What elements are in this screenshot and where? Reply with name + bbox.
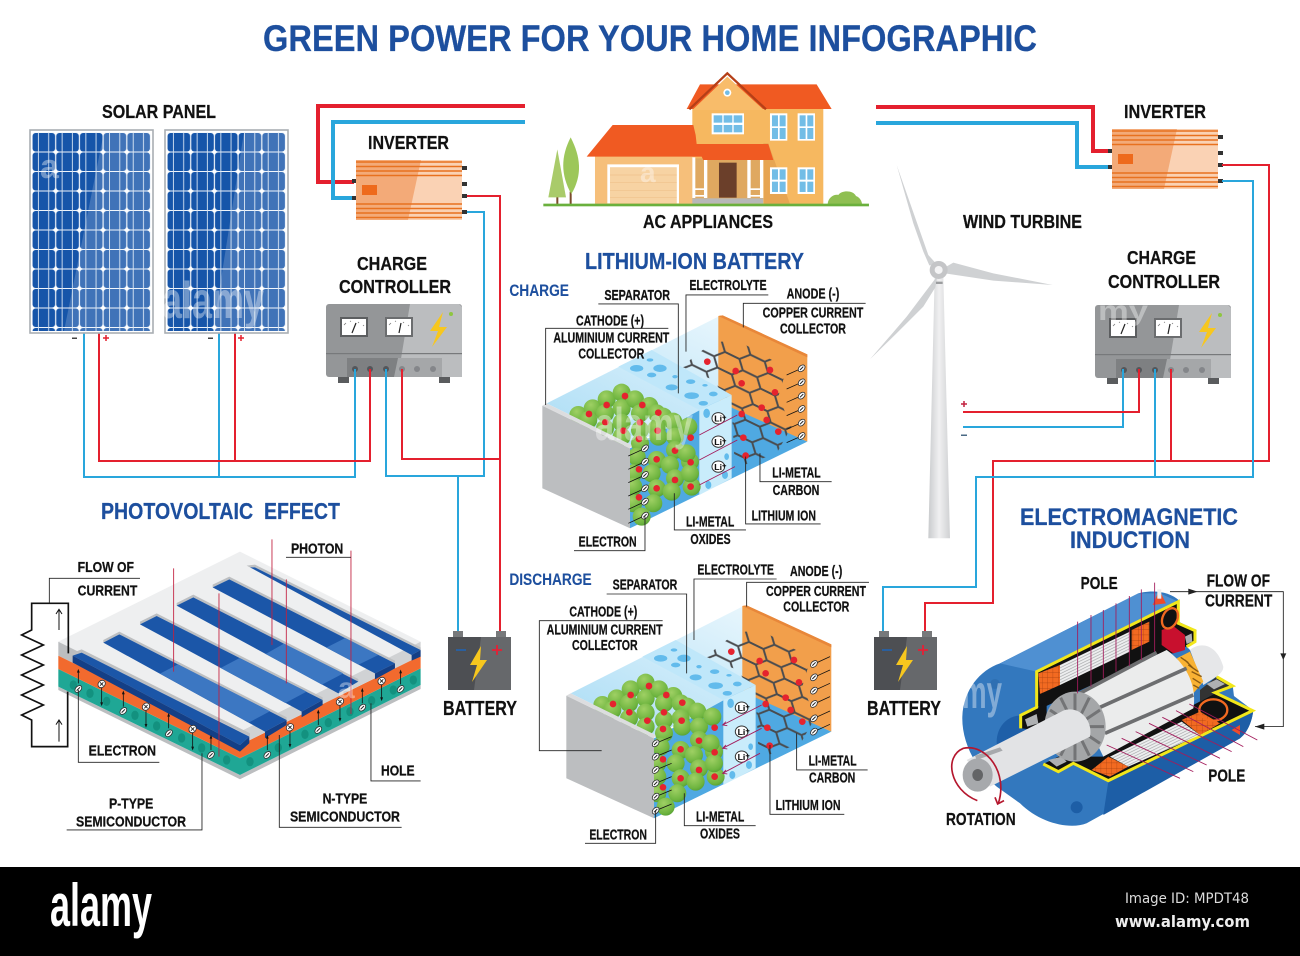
- charge controller label right: CONTROLLER: [1108, 272, 1220, 292]
- lithium ions: [699, 413, 737, 485]
- labels: SEPARATOR: [604, 288, 670, 304]
- stator windings: [1038, 622, 1220, 777]
- icon: charge controller left: [326, 304, 462, 383]
- semiconductor holes: [70, 675, 417, 766]
- lithium ions: Li⁺: [738, 703, 750, 713]
- panel: charge cell: [509, 278, 866, 551]
- icon: wind turbine: [870, 165, 1053, 538]
- shaft: [963, 709, 1090, 792]
- labels: P-TYPE: [109, 796, 153, 812]
- strip front ends: [73, 650, 421, 752]
- labels: ELECTROLYTE: [689, 278, 767, 294]
- labels: [553, 278, 863, 551]
- current flow arrow: [1170, 589, 1286, 730]
- labels: [76, 541, 415, 831]
- right inverter wiring from house: [876, 107, 1111, 167]
- panel: discharge cell: DISCHARGE: [509, 570, 592, 589]
- circuit with resistor: [22, 603, 68, 747]
- stock image watermarks: a: [640, 157, 656, 188]
- icon: solar panel left: [30, 130, 153, 333]
- charge controller label left: CONTROLLER: [339, 277, 451, 297]
- lithium ions: Li⁺: [714, 414, 727, 424]
- electron arrows: [628, 364, 806, 523]
- icon: battery left: [448, 631, 511, 690]
- labels: LITHIUM ION: [752, 509, 816, 525]
- leader lines: [546, 295, 866, 551]
- stock image watermarks: my: [962, 666, 1002, 718]
- wiring: solar panels to charge controller: [84, 333, 370, 477]
- title: GREEN POWER FOR YOUR HOME INFOGRAPHIC: [263, 18, 1037, 59]
- icon: charge controller right: [1095, 305, 1231, 384]
- blue strips: [73, 567, 421, 745]
- labels: ELECTRON: [89, 744, 156, 760]
- labels: LITHIUM ION: [776, 798, 841, 814]
- bottom band: [0, 867, 1300, 956]
- battery cell cutaway: [542, 315, 807, 528]
- magnetic field arrows: [1078, 583, 1257, 778]
- left inverter wiring from house: [318, 106, 525, 198]
- motor housing: [962, 591, 1253, 826]
- charge controller label left: [339, 254, 451, 297]
- layers: [58, 552, 421, 779]
- heading: lithium-ion battery: LITHIUM-ION BATTERY: [585, 248, 804, 274]
- labels: ROTATION: [946, 809, 1016, 829]
- holes and electrons: [74, 676, 405, 760]
- labels: HOLE: [381, 764, 415, 780]
- labels: ALUMINIUM CURRENT: [553, 331, 669, 347]
- labels: LI-METAL: [686, 515, 734, 531]
- labels: COLLECTOR: [783, 600, 850, 616]
- labels: LI-METAL: [696, 810, 744, 826]
- labels: CURRENT: [78, 583, 138, 599]
- labels: ALUMINIUM CURRENT: [547, 622, 663, 638]
- stock image watermarks: [40, 148, 1149, 718]
- labels: ELECTRON: [589, 827, 647, 843]
- labels: COPPER CURRENT: [766, 584, 866, 600]
- electron arrows: [651, 657, 830, 815]
- finger shadows: [68, 565, 421, 737]
- labels: [547, 562, 866, 843]
- labels: N-TYPE: [323, 791, 367, 807]
- icon: inverter left: [352, 160, 467, 220]
- labels: COPPER CURRENT: [763, 305, 863, 321]
- labels: SEMICONDUCTOR: [76, 815, 187, 831]
- labels: POLE: [1081, 573, 1118, 593]
- icon: trees: [548, 137, 579, 204]
- labels: COLLECTOR: [578, 346, 645, 362]
- lithium ions: Li⁺: [738, 727, 750, 737]
- lithium ions: Li⁺: [738, 752, 750, 762]
- ac appliances label: AC APPLIANCES: [643, 212, 773, 232]
- battery label right: BATTERY: [867, 698, 942, 720]
- labels: COLLECTOR: [572, 638, 638, 654]
- lithium ions: Li⁺: [714, 462, 727, 472]
- labels: POLE: [1208, 766, 1245, 786]
- wind turbine polarity marks: [961, 401, 967, 436]
- labels: CARBON: [809, 771, 855, 787]
- battery label left: BATTERY: [443, 698, 518, 720]
- heading: electromagnetic induction: [1020, 504, 1238, 554]
- website: www.alamy.com: [1115, 912, 1250, 931]
- labels: FLOW OF: [1207, 571, 1270, 591]
- charge controller label right: CHARGE: [1127, 248, 1196, 268]
- charge carrier arrows: [77, 670, 402, 750]
- wiring: right inverter and controller to right battery: [883, 165, 1269, 633]
- panel: discharge cell: [509, 562, 869, 843]
- labels: ELECTROLYTE: [697, 562, 774, 578]
- inverter label left: INVERTER: [368, 133, 449, 153]
- labels: COLLECTOR: [780, 321, 846, 337]
- labels: SEMICONDUCTOR: [290, 810, 401, 826]
- labels: OXIDES: [700, 827, 740, 843]
- rotation arrow: [952, 748, 1004, 804]
- icon: inverter right: [1108, 129, 1223, 189]
- solar panel label: SOLAR PANEL: [102, 102, 216, 122]
- photon lines: [174, 539, 351, 757]
- stock image watermarks: a: [40, 148, 60, 186]
- labels: ANODE (-): [790, 564, 842, 580]
- leader lines: [49, 557, 421, 830]
- icon: battery right: [874, 631, 937, 690]
- panel: charge cell: CHARGE: [509, 281, 569, 300]
- inverter label right: INVERTER: [1124, 102, 1206, 122]
- labels: LI-METAL: [809, 754, 857, 770]
- icon: solar panel right: [165, 130, 288, 333]
- solar panel polarity marks: [72, 335, 244, 341]
- labels: ANODE (-): [787, 286, 839, 302]
- labels: CURRENT: [1205, 591, 1272, 611]
- lithium ions: [723, 702, 762, 774]
- labels: PHOTON: [291, 541, 343, 557]
- heading: electromagnetic induction: ELECTROMAGNETIC: [1020, 504, 1238, 531]
- labels: LI-METAL: [772, 466, 821, 482]
- panel: photovoltaic effect cell: [22, 539, 421, 831]
- labels: CATHODE (+): [569, 605, 637, 621]
- heading: electromagnetic induction: INDUCTION: [1070, 527, 1190, 554]
- labels: FLOW OF: [78, 560, 134, 576]
- labels: ELECTRON: [579, 535, 637, 551]
- panel: electric motor cutaway: [946, 571, 1286, 829]
- icon: bush: [828, 191, 862, 204]
- charge controller label right: [1108, 248, 1220, 292]
- rotor: [1044, 645, 1223, 762]
- battery cell cutaway: [566, 605, 831, 818]
- cutaway opening: [1021, 602, 1253, 781]
- labels: OXIDES: [690, 532, 731, 548]
- brush and coils: [1153, 589, 1240, 735]
- wind turbine label: WIND TURBINE: [963, 212, 1082, 232]
- icon: house: [543, 73, 869, 206]
- image id: Image ID: MPDT48: [1125, 891, 1249, 907]
- labels: CATHODE (+): [576, 314, 644, 330]
- stock image watermarks: alamy: [162, 272, 264, 330]
- lithium ions: Li⁺: [714, 437, 727, 447]
- labels: CARBON: [773, 483, 819, 499]
- labels: [946, 571, 1272, 829]
- stock image watermarks: a: [338, 672, 355, 705]
- wiring: inverter and controller to left battery: [386, 196, 500, 633]
- labels: SEPARATOR: [613, 577, 678, 593]
- stock image watermarks: alamy: [595, 398, 693, 450]
- leader lines: [539, 579, 869, 843]
- stock image watermarks: my: [1098, 295, 1149, 326]
- charge controller label left: CHARGE: [357, 254, 427, 274]
- heading: photovoltaic effect: PHOTOVOLTAIC EFFECT: [101, 498, 340, 524]
- alamy logo: alamy: [50, 872, 152, 939]
